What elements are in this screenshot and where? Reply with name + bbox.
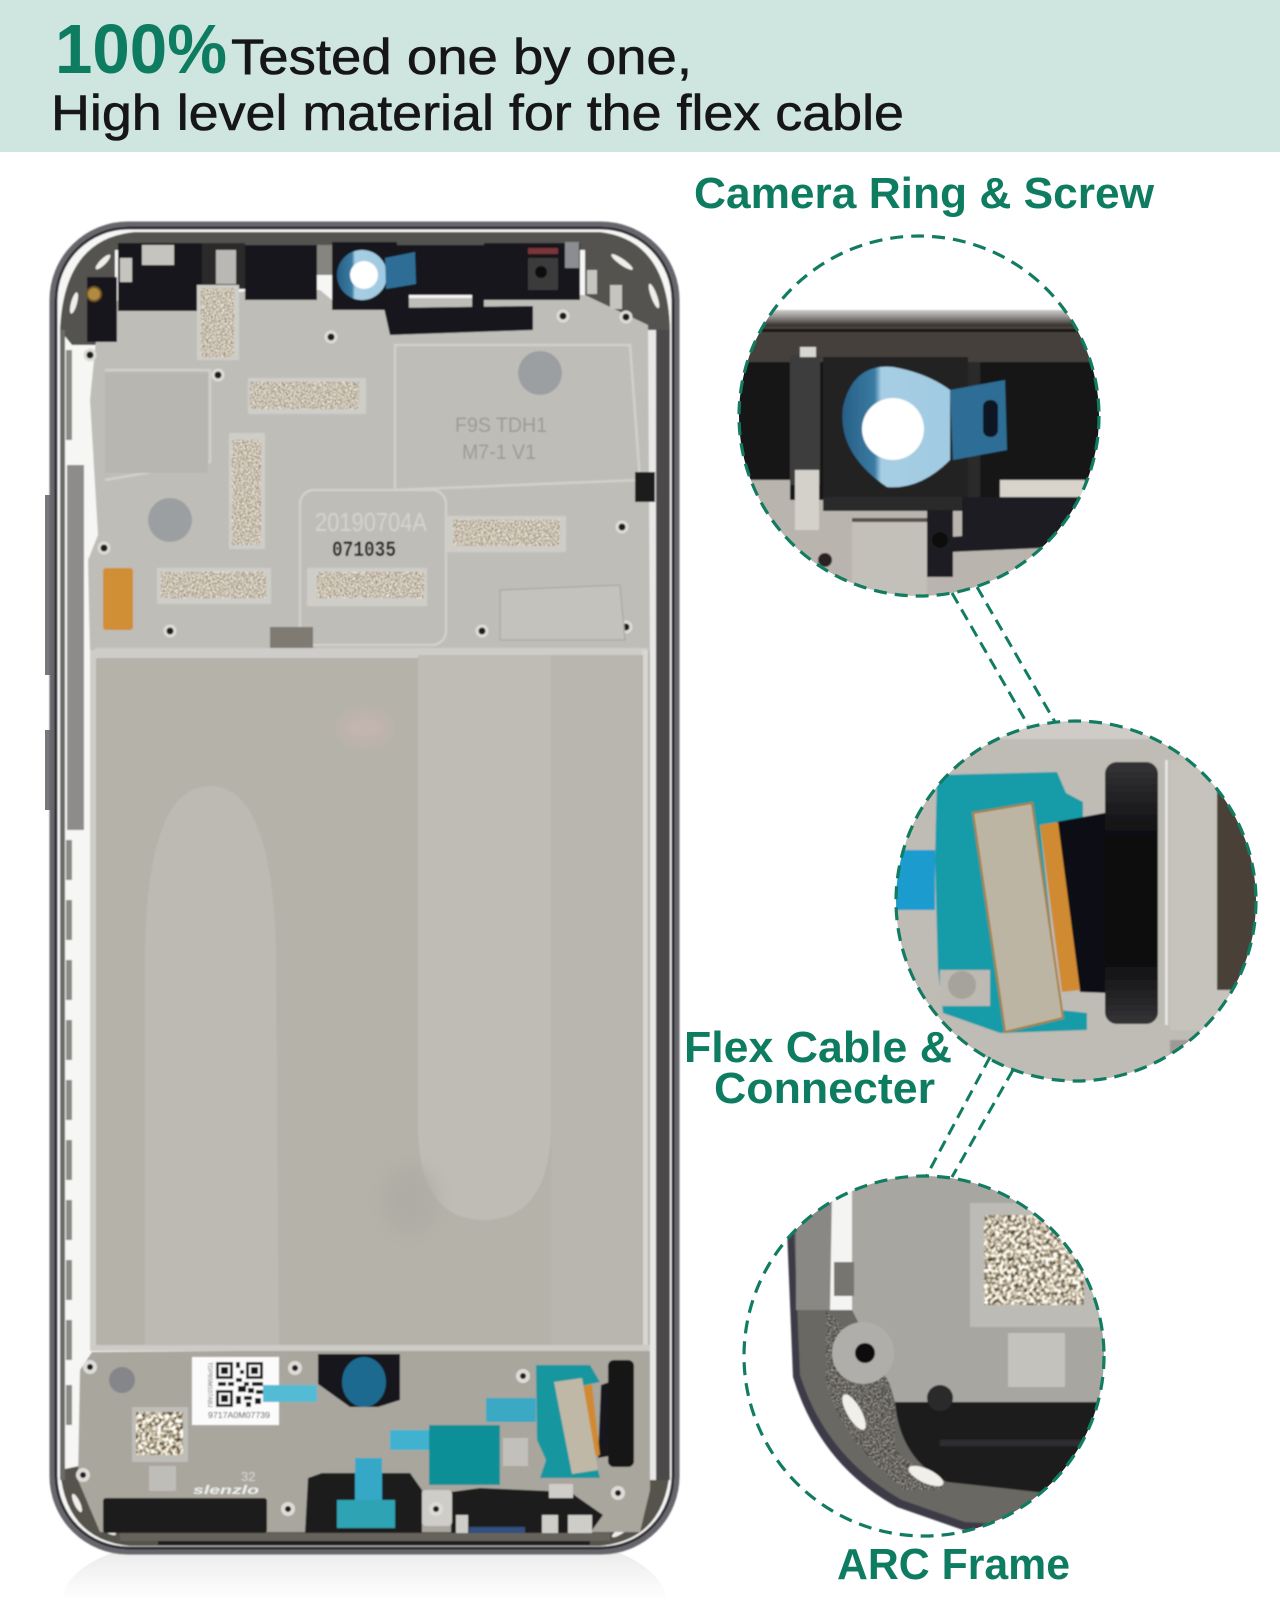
plate screws (85, 311, 631, 636)
label number: 9717A0M07739 (208, 1411, 271, 1420)
outer rim (52, 224, 677, 1552)
gold pad textures (161, 288, 560, 598)
phone frame photo: slenzlo (193, 1483, 259, 1497)
camera ring (337, 250, 387, 300)
right edge strip (656, 330, 670, 1480)
metal tab (270, 627, 313, 649)
gold screw (87, 287, 101, 301)
gold pads with border (157, 285, 566, 606)
gold square (132, 1407, 188, 1462)
flex connector (536, 1360, 634, 1478)
QR label (192, 1357, 279, 1425)
sensor (528, 248, 558, 254)
header band (0, 0, 1280, 152)
rim grey top (795, 1202, 832, 1311)
teal lower sticker (355, 1458, 382, 1500)
headline: 100%: 100% (55, 10, 227, 88)
label: camera ring: Camera Ring & Screw (694, 169, 1155, 218)
pad border (970, 1203, 1100, 1327)
speckled inner corners (60, 232, 670, 345)
upper plate (88, 290, 650, 655)
zoom circle: flex cable (890, 715, 1265, 1090)
label: flex cable: Connecter (714, 1064, 935, 1113)
beige stiffener (973, 803, 1063, 1032)
connector: flex to arc (927, 1057, 1013, 1177)
silver bottom clips (422, 1484, 592, 1535)
stamped bottom text: 32 (241, 1469, 255, 1484)
white dashes (841, 1393, 867, 1431)
blue small part (469, 1527, 525, 1535)
QR code (216, 1362, 263, 1407)
pink smudge (339, 712, 391, 744)
label: flex cable (684, 1023, 952, 1113)
headline: first line: Tested one by one, (231, 29, 692, 85)
battery plate (90, 652, 650, 1347)
lower metal (767, 498, 1040, 596)
raised plate shading (105, 345, 640, 645)
lower black blocks (103, 1473, 603, 1533)
zoom circle: arc frame (744, 1170, 1110, 1540)
battery light panel: left (145, 786, 279, 1348)
phone frame photo: 20190704A (315, 507, 428, 537)
ring sticker (842, 367, 950, 487)
left edge strip (67, 465, 84, 830)
side buttons (45, 495, 51, 810)
frame rim (786, 1232, 988, 1531)
left notches (66, 350, 72, 1425)
camera cut-out (318, 1354, 400, 1407)
phone frame photo: 071035 (332, 538, 396, 563)
battery light panel: right (418, 655, 551, 1220)
label rotated id: TDP9SM107ABJ (206, 1362, 212, 1407)
screw boss (832, 1322, 894, 1384)
black speaker (894, 1401, 1096, 1493)
left thin dark inner edge (60, 330, 65, 1480)
bottom rim (120, 1533, 610, 1541)
rim texture (826, 1310, 945, 1490)
label: arc frame: ARC Frame (837, 1540, 1070, 1589)
grey plate (852, 1170, 1110, 1405)
dark smudge (380, 1164, 440, 1236)
phone reflection (62, 1553, 668, 1600)
grey round holes (518, 351, 562, 395)
phone frame photo: M7-1 V1 (462, 441, 536, 464)
corner white marks (68, 252, 661, 1539)
grey hole bottom (109, 1367, 135, 1393)
lower screws (78, 1362, 623, 1514)
black clip (635, 472, 655, 502)
flex tab (103, 568, 133, 630)
teal shield (429, 1425, 500, 1485)
black top parts (87, 242, 580, 342)
zoom circle: camera ring (730, 236, 1112, 610)
label: flex cable: Flex Cable & (684, 1023, 952, 1072)
upper recess detail (500, 585, 625, 640)
connector: camera to flex (952, 587, 1055, 725)
orange flex (1040, 822, 1080, 992)
white strip (830, 1190, 852, 1310)
headline: second line: High level material for the flex cable (51, 85, 904, 141)
lower plate (78, 1348, 650, 1532)
silver clips (120, 242, 622, 309)
tape strips (263, 1385, 536, 1450)
phone frame photo (52, 224, 677, 1552)
black flex (1056, 812, 1110, 993)
stamped text: F9S TDH1 (455, 414, 547, 437)
